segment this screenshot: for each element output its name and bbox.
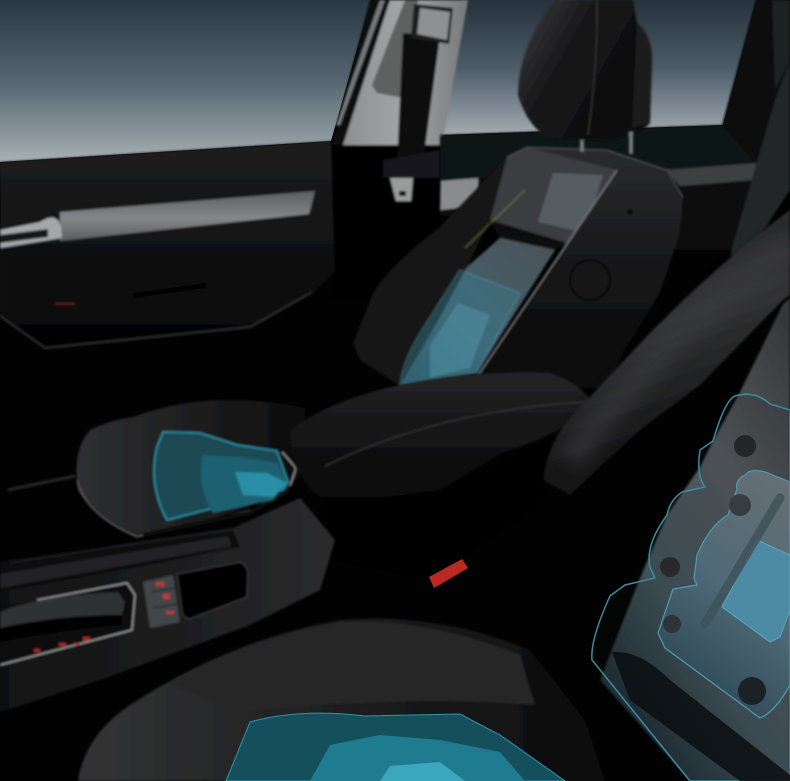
right window — [440, 0, 756, 135]
centre console — [0, 498, 335, 712]
seat control buttons — [143, 575, 180, 628]
red seat belt latch — [429, 559, 468, 588]
near seat backrest — [543, 210, 790, 781]
leather insert — [600, 298, 790, 781]
seat heating pad: near backrest — [592, 394, 790, 781]
right wing — [478, 147, 683, 393]
armrest — [290, 372, 594, 580]
seat heating pad: far backrest — [400, 190, 525, 386]
headrest — [518, 0, 652, 154]
far seat backrest — [353, 147, 683, 393]
door pillar with seat belt — [332, 0, 468, 300]
near seat cushion — [78, 619, 605, 781]
left bolster — [353, 157, 507, 386]
door panel — [0, 141, 335, 350]
seat crease — [612, 652, 790, 781]
lower centre panel — [400, 238, 555, 386]
seat heating pad: near cushion — [226, 713, 565, 781]
seat heating pad: far cushion — [154, 432, 288, 520]
bolster — [543, 210, 790, 495]
upper centre panel — [490, 147, 617, 243]
far seat cushion — [8, 400, 305, 537]
right door strip — [440, 0, 790, 258]
storage tray — [177, 562, 248, 619]
left window — [0, 0, 371, 162]
